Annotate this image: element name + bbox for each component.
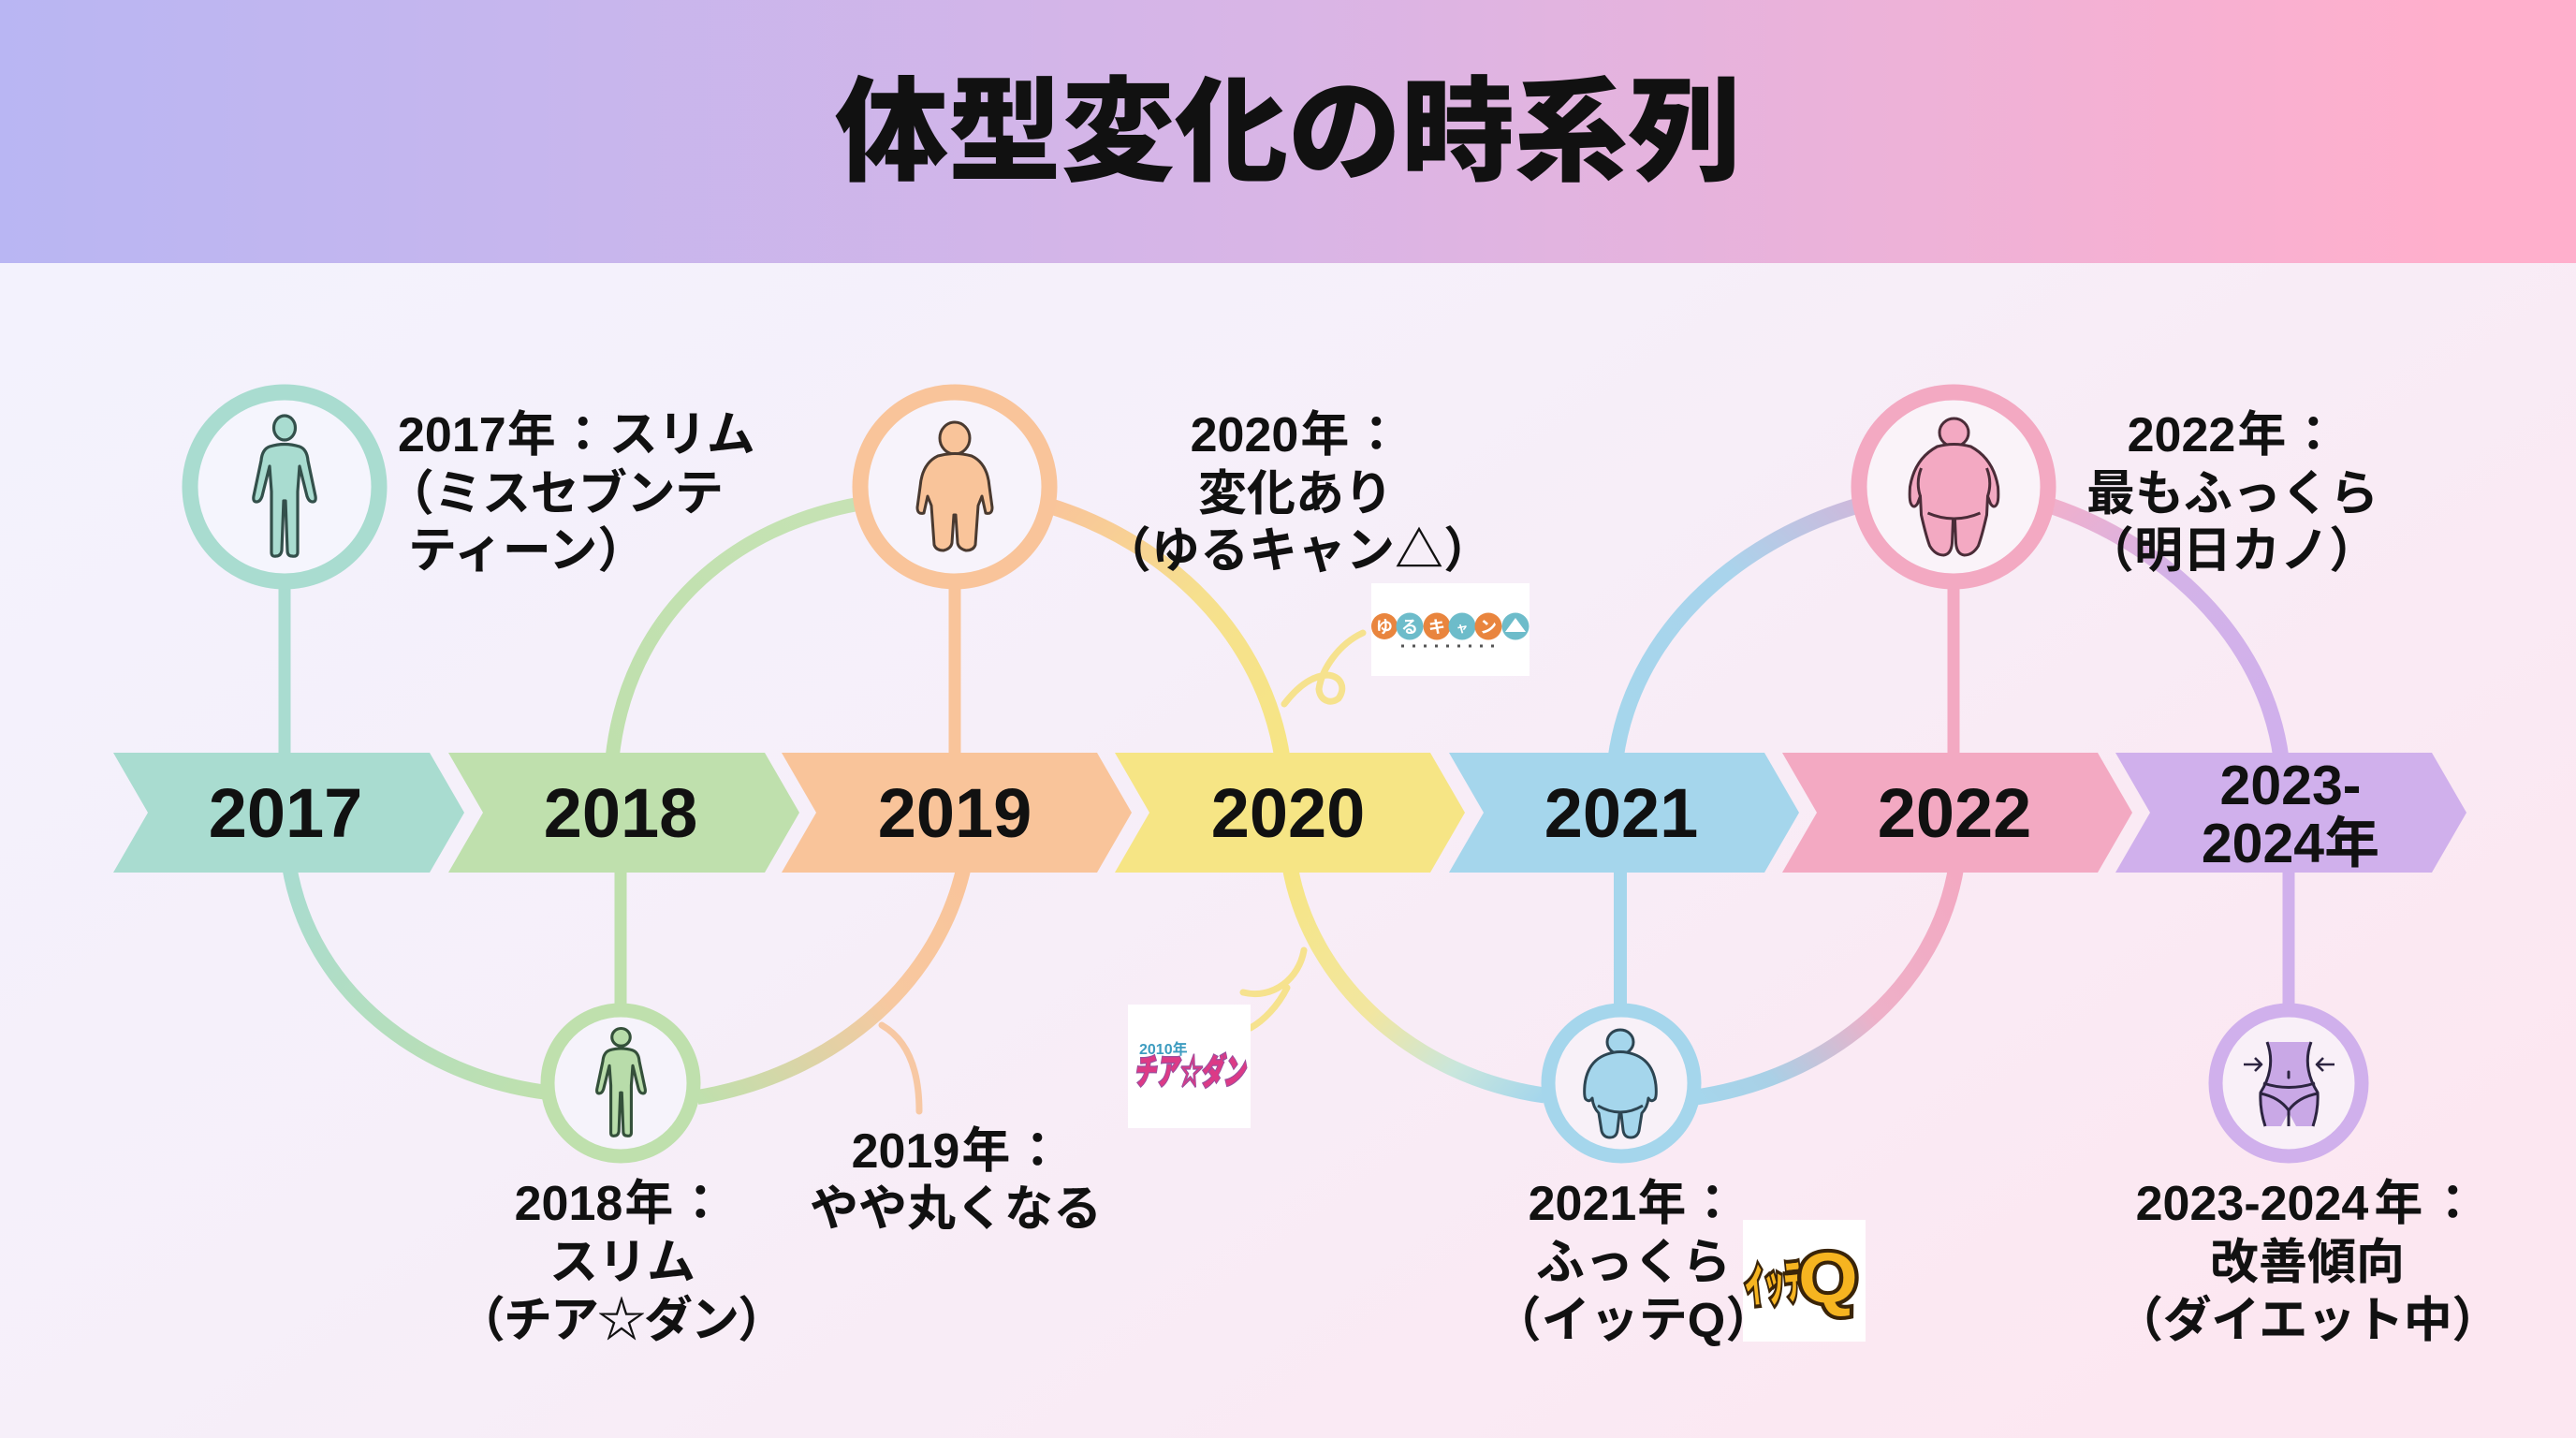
ring: 2023-2024 waist icon	[2216, 1010, 2362, 1156]
logo: Yuru Camp	[1371, 583, 1530, 676]
logo: Itte Q: イッテ	[1742, 1256, 1807, 1313]
caption: 2022: 2022年：	[2128, 408, 2337, 462]
logo: Yuru Camp: ャ	[1456, 621, 1469, 635]
caption: 2023-2024: （ダイエット中）	[2115, 1294, 2500, 1348]
icon: slim body	[254, 416, 315, 556]
caption: 2023-2024	[2115, 1177, 2500, 1348]
logo: Yuru Camp: ン	[1480, 618, 1497, 637]
logo: Yuru Camp: る	[1401, 618, 1418, 637]
logo: Itte Q	[1742, 1220, 1866, 1342]
caption: 2020: （ゆるキャン△）	[1103, 524, 1492, 579]
chevron 2018: 2018	[544, 774, 697, 852]
logo: Itte Q: Q	[1798, 1238, 1858, 1317]
timeline chevrons	[113, 753, 2466, 874]
icon: chubby body	[1585, 1030, 1656, 1137]
caption: 2021: ふっくら	[1536, 1236, 1731, 1290]
branch: 2019 callout	[882, 1025, 919, 1111]
caption: 2018: （チア☆ダン）	[457, 1294, 784, 1348]
logo: Cheer Dan: チア☆ダン	[1134, 1052, 1247, 1093]
ring: 2019 slightly round figure	[860, 392, 1049, 581]
caption: 2021: 2021年：	[1529, 1177, 1736, 1231]
caption: 2021	[1493, 1177, 1774, 1348]
caption: 2022: （明日カノ）	[2086, 524, 2378, 579]
caption: 2020: 2020年：	[1191, 408, 1400, 462]
chevron 2021: 2021	[1544, 774, 1698, 852]
ring: 2017 slim figure	[190, 392, 379, 581]
icon: waist with arrows	[2244, 1042, 2334, 1126]
caption: 2023-2024: 2023-2024年：	[2136, 1177, 2477, 1231]
caption: 2021: （イッテQ）	[1493, 1294, 1774, 1348]
caption: 2019: やや丸くなる	[810, 1182, 1102, 1237]
chevron 2023-2024: 2023-	[2220, 755, 2361, 816]
logo: Yuru Camp: キ	[1428, 618, 1445, 637]
chevron 2019	[782, 753, 1132, 873]
branch: Cheer Dan logo vine	[1243, 950, 1304, 1028]
caption: 2017: ティーン）	[408, 524, 646, 579]
icon: fullest body	[1910, 418, 1998, 555]
connector arcs and stems	[285, 503, 2289, 1097]
logo: Yuru Camp: ゆ	[1376, 618, 1393, 637]
chevron 2020: 2020	[1211, 774, 1365, 852]
icon: slightly round body	[917, 422, 992, 550]
chevron 2018	[448, 753, 799, 873]
chevron 2023-2024	[2115, 753, 2466, 874]
caption: 2017: （ミスセブンテ	[386, 467, 724, 521]
chevron 2017	[113, 753, 464, 873]
caption: 2017	[386, 408, 755, 579]
caption: 2019	[810, 1124, 1102, 1237]
caption: 2019: 2019年：	[852, 1124, 1061, 1179]
header banner	[0, 0, 2576, 263]
caption: 2020	[1103, 408, 1492, 579]
caption: 2018: 2018年：	[515, 1177, 724, 1231]
chevron 2020	[1115, 753, 1465, 873]
caption: 2022: 最もふっくら	[2086, 467, 2378, 521]
caption: 2017: 2017年：スリム	[398, 408, 755, 462]
chevron 2019: 2019	[878, 774, 1032, 852]
chevron 2022: 2022	[1878, 774, 2031, 852]
branch: Yuru Camp logo vine	[1284, 633, 1363, 704]
chevron 2021	[1449, 753, 1799, 873]
caption: 2018	[457, 1177, 784, 1348]
logo: Cheer Dan: 2010年	[1139, 1040, 1188, 1058]
caption: 2022	[2086, 408, 2378, 579]
chevron 2023-2024: 2024年	[2202, 813, 2379, 874]
chevron 2022	[1782, 753, 2132, 873]
ring: 2021 chubby figure	[1548, 1010, 1694, 1156]
chevron 2017: 2017	[209, 774, 362, 852]
title: 体型変化の時系列	[835, 68, 1741, 196]
logo: Cheer Dan	[1128, 1005, 1251, 1128]
caption: 2018: スリム	[549, 1236, 695, 1290]
caption: 2023-2024: 改善傾向	[2210, 1236, 2405, 1290]
ring: 2022 fullest figure	[1859, 392, 2048, 581]
icon: slim body	[597, 1028, 645, 1136]
caption: 2020: 変化あり	[1198, 467, 1393, 521]
ring: 2018 slim figure	[548, 1010, 694, 1156]
